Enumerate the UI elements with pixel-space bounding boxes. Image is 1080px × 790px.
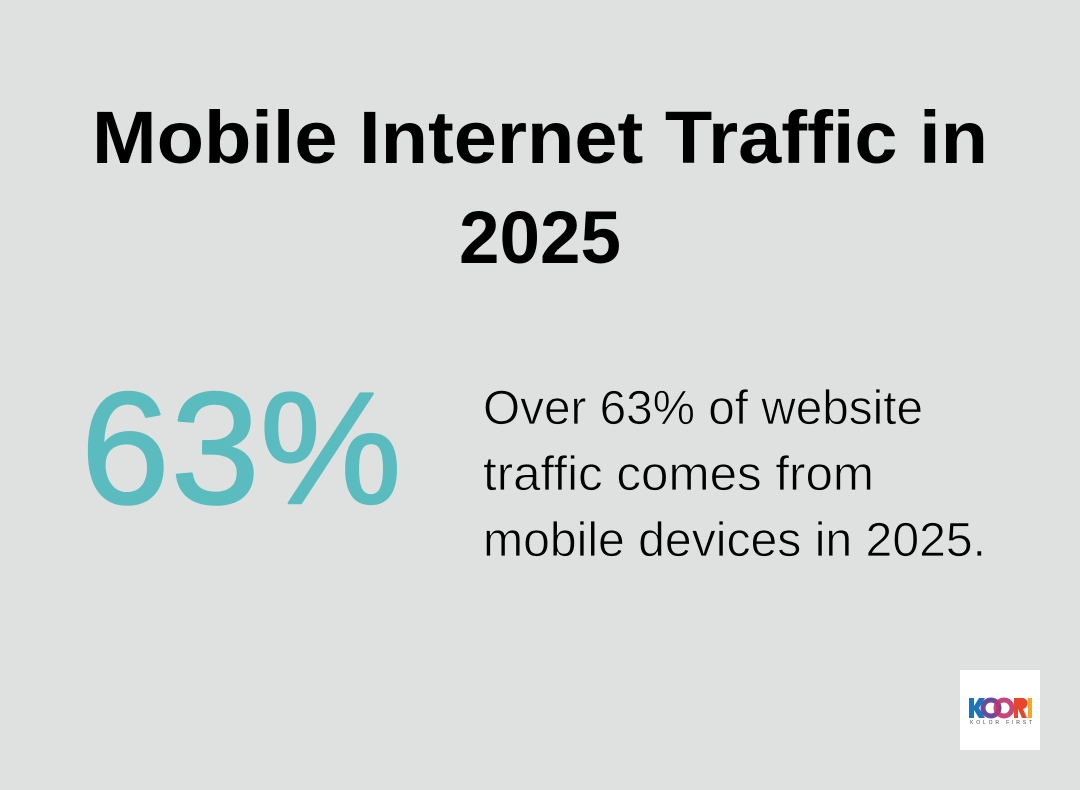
logo mark: KOOR1 xyxy=(969,698,1032,718)
description text: Over 63% of website xyxy=(483,382,923,435)
logo tagline: KOLOR FIRST xyxy=(970,720,1032,726)
big stat: 63%: 63% xyxy=(81,359,401,537)
title: Mobile Internet Traffic in xyxy=(92,96,988,179)
description text: mobile devices in 2025. xyxy=(483,514,986,567)
title xyxy=(92,96,988,279)
title: 2025 xyxy=(459,196,621,279)
description text: traffic comes from xyxy=(483,448,874,501)
logo xyxy=(960,670,1040,750)
description text xyxy=(483,382,986,567)
